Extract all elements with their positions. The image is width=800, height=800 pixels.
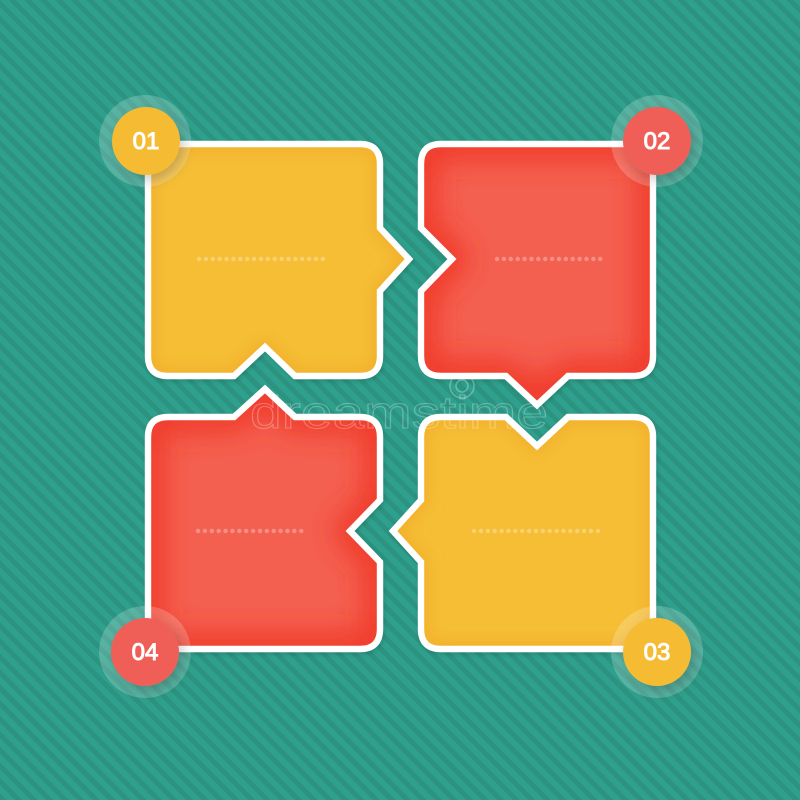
badge 04: 04 xyxy=(132,639,158,666)
badge 03: 03 xyxy=(644,639,670,666)
badge 02: 02 xyxy=(644,128,670,155)
badge 01: 01 xyxy=(133,128,159,155)
panel 2: red xyxy=(421,144,653,405)
panel 1: yellow xyxy=(148,144,409,376)
panel 4 dotted placeholder line xyxy=(198,529,306,533)
watermark xyxy=(250,374,548,438)
watermark: dreamstime xyxy=(250,387,548,438)
infographic xyxy=(99,95,707,703)
badge 02 xyxy=(611,95,703,187)
panel 1 dotted placeholder line xyxy=(199,257,328,261)
panel 2 dotted placeholder line xyxy=(497,257,603,261)
panel 3: yellow xyxy=(393,417,653,649)
badge 03 xyxy=(611,606,703,698)
badge 04 xyxy=(99,606,191,698)
panel 4: red xyxy=(148,389,380,649)
panel 3 dotted placeholder line xyxy=(474,529,602,533)
badge 01 xyxy=(99,95,191,187)
